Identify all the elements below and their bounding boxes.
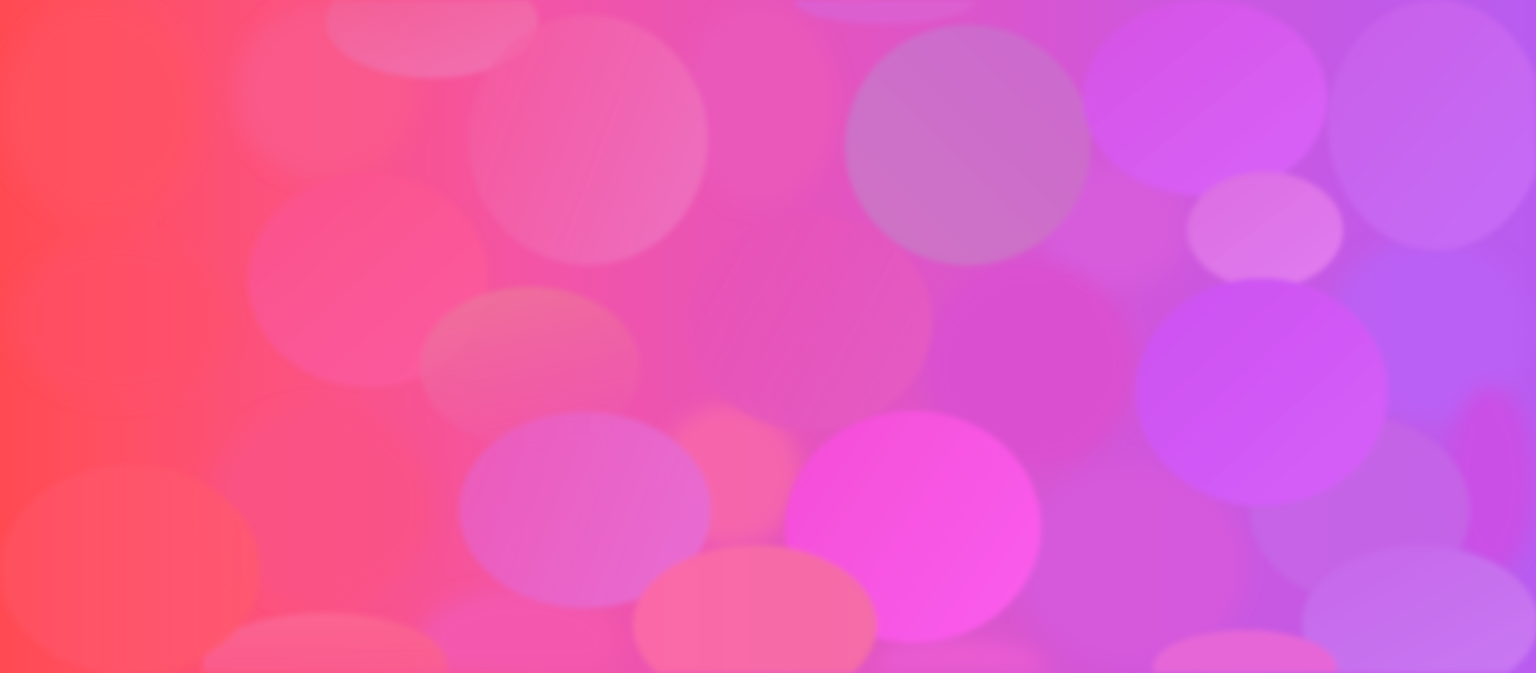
pebble: top centre — [326, 0, 538, 78]
